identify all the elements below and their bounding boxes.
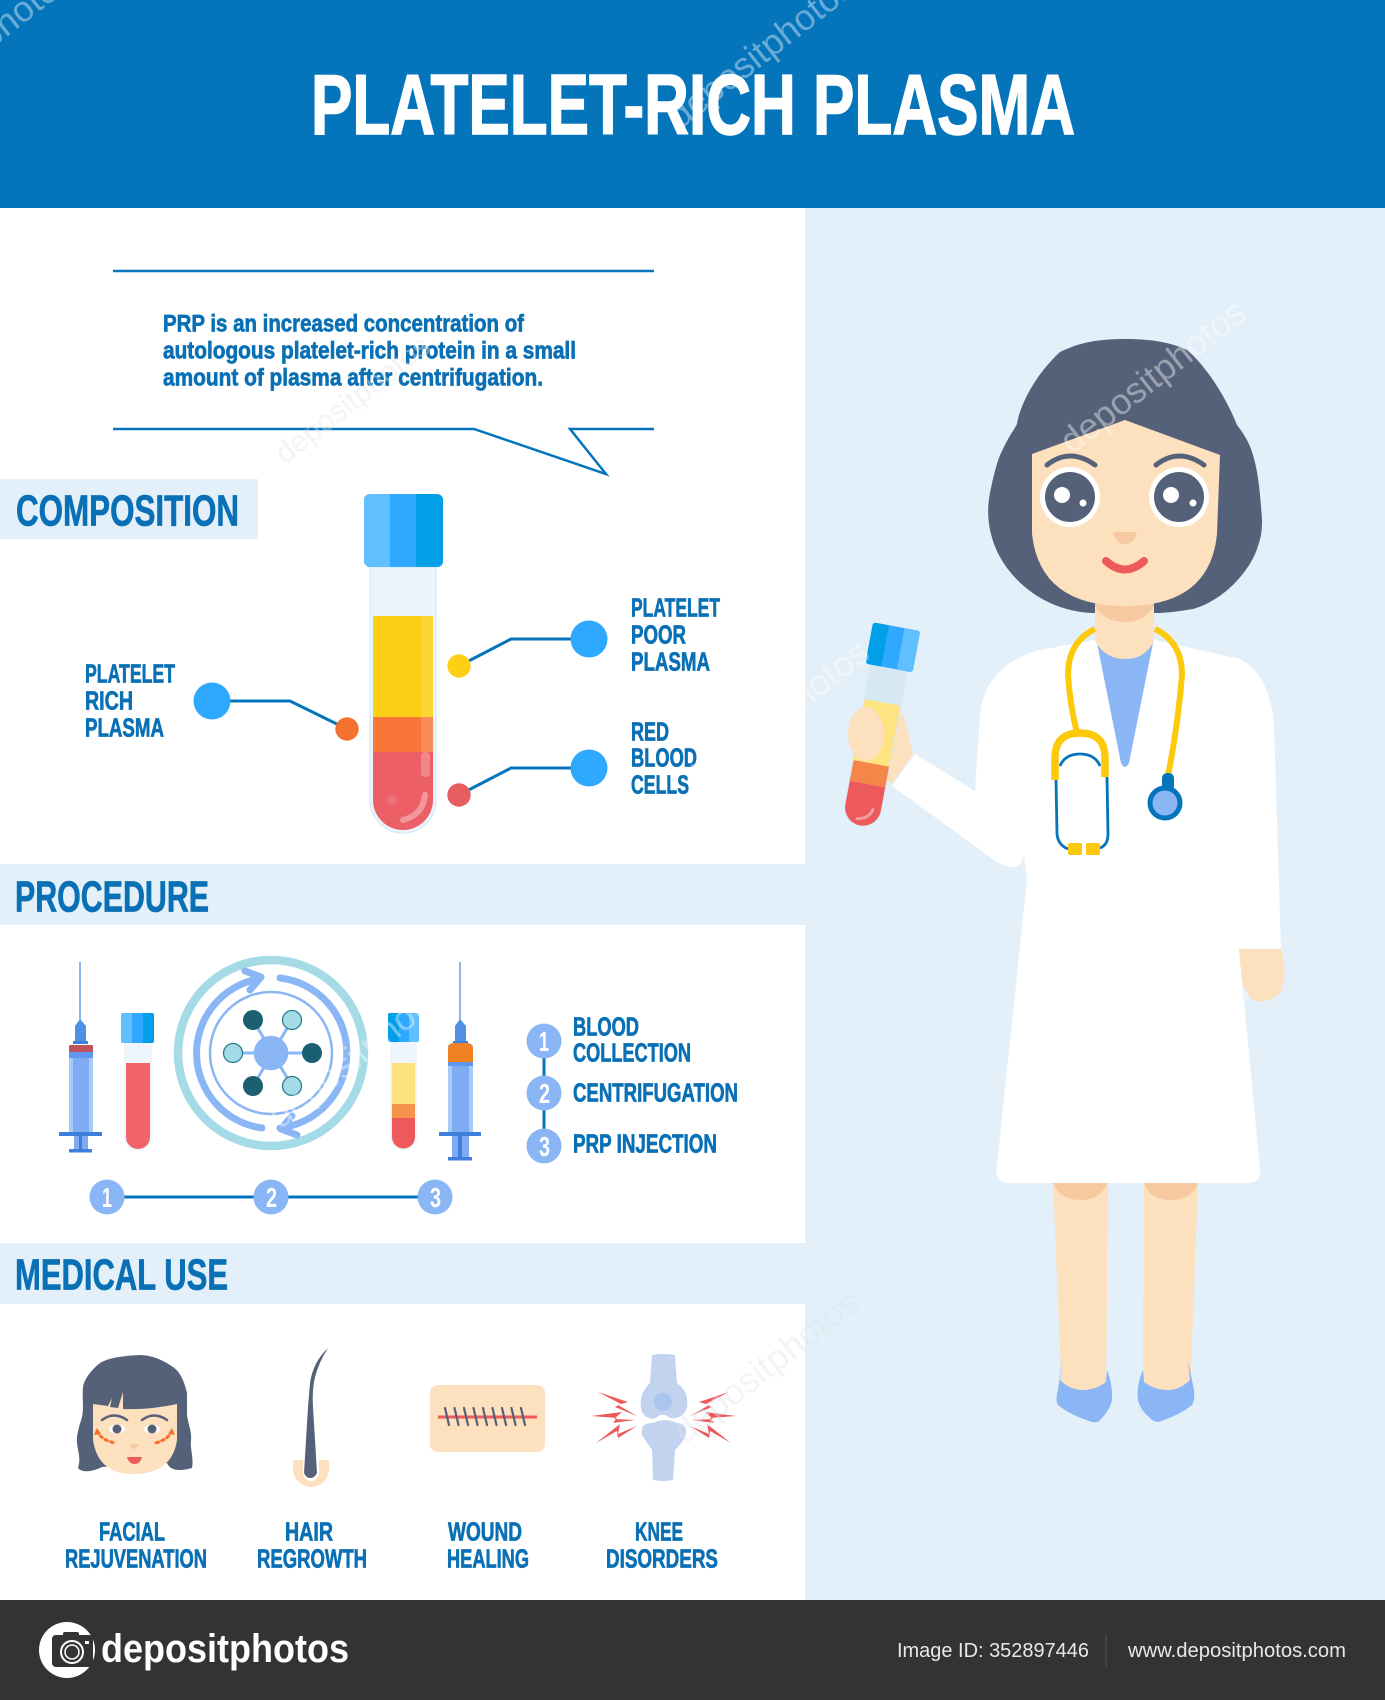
shirt	[1097, 643, 1153, 767]
watermarks: depositphotos	[1055, 971, 1257, 1141]
site url: www.depositphotos.com	[1127, 1640, 1346, 1662]
legend: procedure steps	[526, 1012, 738, 1164]
icon: separated tube	[388, 1013, 419, 1150]
legend: procedure steps: 1	[539, 1026, 549, 1057]
callout: red blood cells	[447, 716, 697, 807]
illustration: doctor	[836, 339, 1284, 1422]
step timeline: 3	[430, 1182, 441, 1213]
panel: doctor background	[805, 208, 1385, 1600]
icon: knee joint	[591, 1354, 736, 1481]
stethoscope	[1055, 629, 1182, 855]
step timeline: 1	[102, 1182, 112, 1213]
mouth	[1106, 561, 1144, 570]
nose	[1113, 532, 1137, 544]
legs	[1053, 1183, 1198, 1395]
right hand	[1236, 949, 1284, 1001]
watermarks: depositphotos	[269, 329, 437, 471]
fingers over tube	[848, 707, 884, 761]
text block: use labels: KNEE	[635, 1516, 683, 1546]
callout: platelet rich plasma	[85, 658, 359, 742]
callout: platelet rich plasma: PLASMA	[85, 712, 164, 742]
brows	[1047, 456, 1204, 465]
image id: Image ID: 352897446	[897, 1640, 1089, 1662]
heading: medical use: MEDICAL USE	[15, 1250, 228, 1300]
text block: use labels: REGROWTH	[257, 1544, 367, 1574]
callout: platelet poor plasma	[447, 592, 720, 678]
text block: use labels: WOUND	[448, 1516, 522, 1546]
legend: procedure steps: CENTRIFUGATION	[573, 1078, 738, 1108]
title: PLATELET-RICH PLASMA	[311, 58, 1075, 153]
text block: definition	[163, 310, 576, 392]
callout: red blood cells: BLOOD	[631, 742, 697, 772]
icon: blood tube	[121, 1013, 154, 1151]
text block: use labels: DISORDERS	[606, 1544, 718, 1574]
icon: syringe injecting PRP	[439, 962, 481, 1160]
icon: syringe drawing blood	[59, 962, 102, 1152]
text block: use labels: REJUVENATION	[65, 1544, 207, 1574]
chart: composition test tube	[364, 494, 443, 833]
heading: composition: COMPOSITION	[16, 486, 239, 536]
text block: use labels: HEALING	[447, 1544, 529, 1574]
text block: definition: PRP is an increased concentration of	[163, 310, 525, 338]
legend: procedure steps: 3	[539, 1131, 550, 1162]
footer bar	[0, 1600, 1385, 1700]
shoes	[1056, 1360, 1194, 1422]
callout: platelet poor plasma: POOR	[631, 620, 686, 650]
heading: procedure: PROCEDURE	[15, 872, 209, 922]
eyes	[1040, 467, 1209, 527]
step timeline	[90, 1180, 452, 1214]
callout: red blood cells: RED	[631, 716, 669, 746]
text block: definition: amount of plasma after centrifugation.	[163, 364, 543, 392]
held test tube	[836, 622, 920, 831]
icon: hair follicle	[293, 1348, 329, 1487]
logo: depositphotos	[39, 1622, 349, 1678]
heading: medical use	[0, 1243, 805, 1304]
face	[1032, 420, 1220, 606]
icon: stitched wound	[430, 1385, 545, 1452]
callout: platelet rich plasma: PLATELET	[85, 658, 175, 688]
hand behind tube	[875, 713, 913, 784]
heading: procedure	[0, 864, 805, 925]
callout: red blood cells: CELLS	[631, 770, 689, 800]
icon: centrifuge	[178, 960, 364, 1146]
callout: platelet poor plasma: PLATELET	[631, 592, 720, 622]
text block: use labels	[65, 1516, 718, 1574]
neck	[1095, 602, 1154, 659]
watermarks	[0, 0, 1257, 1451]
text block: definition: autologous platelet-rich protein in a small	[163, 338, 576, 364]
legend: procedure steps: PRP INJECTION	[573, 1128, 717, 1158]
callout: platelet poor plasma: PLASMA	[631, 646, 710, 676]
heading: composition	[0, 479, 258, 539]
legend: procedure steps: BLOOD	[573, 1012, 639, 1042]
watermarks: depositphotos	[1052, 291, 1254, 461]
callout: definition speech bubble	[113, 271, 654, 474]
icon: facial rejuvenation	[77, 1355, 193, 1474]
callout: platelet rich plasma: RICH	[85, 686, 133, 716]
text block: use labels: HAIR	[285, 1516, 333, 1546]
legend: procedure steps: 2	[539, 1078, 550, 1109]
text block: use labels: FACIAL	[99, 1516, 165, 1546]
watermarks: depositphotos	[260, 966, 462, 1136]
watermarks: depositphotos	[665, 1281, 867, 1451]
watermarks: depositphotos	[675, 631, 877, 801]
header banner	[0, 0, 1385, 208]
legend: procedure steps: COLLECTION	[573, 1038, 691, 1068]
hair	[988, 339, 1262, 613]
step timeline: 2	[266, 1182, 277, 1213]
lab coat	[892, 640, 1281, 1183]
pain bolts	[591, 1392, 736, 1443]
logo: depositphotos: depositphotos	[101, 1627, 349, 1671]
